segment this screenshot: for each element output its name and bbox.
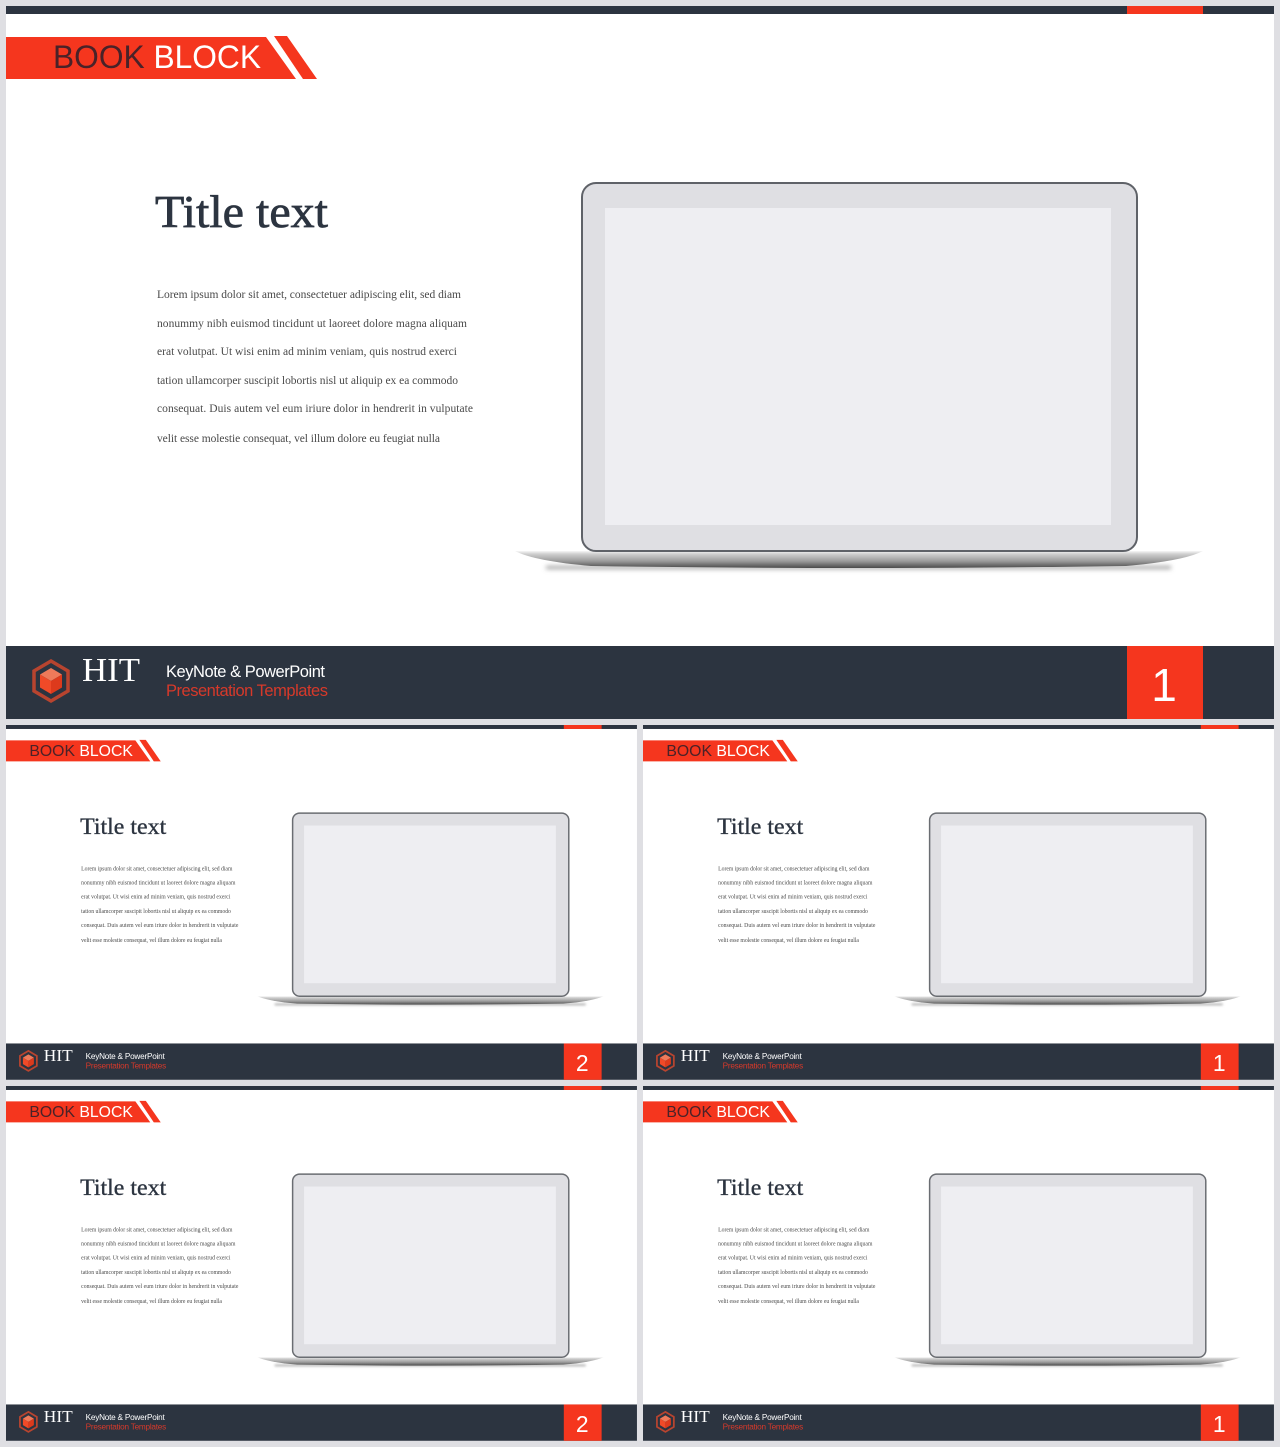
body text: tation ullamcorper suscipit lobortis nisl ut aliquip ex ea commodo bbox=[718, 1270, 868, 1276]
body text: tation ullamcorper suscipit lobortis nisl ut aliquip ex ea commodo bbox=[81, 1270, 231, 1276]
body text: Lorem ipsum dolor sit amet, consectetuer adipiscing elit, sed diam bbox=[81, 1227, 233, 1233]
footer: HIT bbox=[681, 1046, 710, 1065]
top bar bbox=[6, 6, 1274, 14]
body text: erat volutpat. Ut wisi enim ad minim veniam, quis nostrud exerci bbox=[81, 895, 231, 901]
body text: Lorem ipsum dolor sit amet, consectetuer adipiscing elit, sed diam bbox=[718, 1227, 870, 1233]
footer: Presentation Templates bbox=[86, 1061, 166, 1070]
footer: 2 bbox=[576, 1050, 589, 1076]
body text: nonummy nibh euismod tincidunt ut laoreet dolore magna aliquam bbox=[81, 1242, 236, 1248]
ribbon: BOOK BLOCK: BOOK BLOCK bbox=[666, 1104, 770, 1121]
body text: consequat. Duis autem vel eum iriure dolor in hendrerit in vulputate bbox=[157, 403, 473, 415]
body text: consequat. Duis autem vel eum iriure dolor in hendrerit in vulputate bbox=[81, 923, 239, 929]
title: Title text bbox=[155, 186, 328, 237]
footer: Presentation Templates bbox=[723, 1422, 803, 1431]
body text: erat volutpat. Ut wisi enim ad minim veniam, quis nostrud exerci bbox=[718, 895, 868, 901]
body text: consequat. Duis autem vel eum iriure dolor in hendrerit in vulputate bbox=[718, 1284, 876, 1290]
top bar bbox=[6, 1086, 637, 1090]
ribbon: BOOK BLOCK: BOOK BLOCK bbox=[53, 39, 261, 75]
laptop bbox=[515, 183, 1203, 569]
slide 2: small, top left bbox=[6, 725, 637, 1080]
top bar bbox=[643, 725, 1274, 729]
body text: erat volutpat. Ut wisi enim ad minim veniam, quis nostrud exerci bbox=[81, 1256, 231, 1262]
body text: consequat. Duis autem vel eum iriure dolor in hendrerit in vulputate bbox=[718, 923, 876, 929]
body text bbox=[81, 866, 239, 944]
ribbon: BOOK BLOCK bbox=[6, 36, 317, 79]
footer: 1 bbox=[1213, 1411, 1226, 1437]
body text: erat volutpat. Ut wisi enim ad minim veniam, quis nostrud exerci bbox=[718, 1256, 868, 1262]
body text: tation ullamcorper suscipit lobortis nisl ut aliquip ex ea commodo bbox=[157, 375, 458, 387]
ribbon: BOOK BLOCK: BOOK BLOCK bbox=[29, 743, 133, 760]
body text: velit esse molestie consequat, vel illum dolore eu feugiat nulla bbox=[81, 1298, 222, 1305]
body text: velit esse molestie consequat, vel illum dolore eu feugiat nulla bbox=[157, 433, 440, 445]
laptop bbox=[894, 813, 1241, 1005]
body text: tation ullamcorper suscipit lobortis nisl ut aliquip ex ea commodo bbox=[718, 909, 868, 915]
footer: Presentation Templates bbox=[166, 682, 328, 700]
footer bbox=[643, 1404, 1274, 1441]
body text: Lorem ipsum dolor sit amet, consectetuer adipiscing elit, sed diam bbox=[718, 866, 870, 872]
ribbon: BOOK BLOCK: BOOK BLOCK bbox=[29, 1104, 133, 1121]
body text: nonummy nibh euismod tincidunt ut laoreet dolore magna aliquam bbox=[81, 881, 236, 887]
body text bbox=[718, 866, 876, 944]
body text bbox=[157, 289, 473, 445]
footer: KeyNote & PowerPoint bbox=[723, 1413, 802, 1422]
ribbon: BOOK BLOCK bbox=[6, 1101, 161, 1122]
footer bbox=[6, 1043, 637, 1080]
body text: consequat. Duis autem vel eum iriure dolor in hendrerit in vulputate bbox=[81, 1284, 239, 1290]
footer bbox=[6, 1404, 637, 1441]
footer: HIT bbox=[681, 1407, 710, 1426]
slide 4: small, bottom left bbox=[6, 1086, 637, 1441]
top bar bbox=[643, 1086, 1274, 1090]
body text: tation ullamcorper suscipit lobortis nisl ut aliquip ex ea commodo bbox=[81, 909, 231, 915]
title: Title text bbox=[717, 814, 804, 839]
body text: velit esse molestie consequat, vel illum dolore eu feugiat nulla bbox=[81, 937, 222, 944]
footer bbox=[643, 1043, 1274, 1080]
body text bbox=[81, 1227, 239, 1305]
footer bbox=[6, 646, 1274, 719]
footer: KeyNote & PowerPoint bbox=[86, 1413, 165, 1422]
footer: KeyNote & PowerPoint bbox=[86, 1052, 165, 1061]
footer: KeyNote & PowerPoint bbox=[166, 663, 325, 681]
slide 5: small, bottom right bbox=[643, 1086, 1274, 1441]
laptop bbox=[894, 1174, 1241, 1366]
body text: Lorem ipsum dolor sit amet, consectetuer adipiscing elit, sed diam bbox=[157, 289, 461, 301]
body text: velit esse molestie consequat, vel illum dolore eu feugiat nulla bbox=[718, 937, 859, 944]
ribbon: BOOK BLOCK bbox=[643, 1101, 798, 1122]
footer: HIT bbox=[82, 652, 140, 689]
title: Title text bbox=[717, 1175, 804, 1200]
footer: Presentation Templates bbox=[723, 1061, 803, 1070]
footer: KeyNote & PowerPoint bbox=[723, 1052, 802, 1061]
title: Title text bbox=[80, 1175, 167, 1200]
body text: nonummy nibh euismod tincidunt ut laoreet dolore magna aliquam bbox=[718, 881, 873, 887]
footer: 2 bbox=[576, 1411, 589, 1437]
body text: nonummy nibh euismod tincidunt ut laoreet dolore magna aliquam bbox=[157, 318, 467, 330]
slide 3: small, top right bbox=[643, 725, 1274, 1080]
footer: HIT bbox=[44, 1046, 73, 1065]
body text: erat volutpat. Ut wisi enim ad minim veniam, quis nostrud exerci bbox=[157, 346, 457, 358]
top bar bbox=[6, 725, 637, 729]
ribbon: BOOK BLOCK: BOOK BLOCK bbox=[666, 743, 770, 760]
body text: velit esse molestie consequat, vel illum dolore eu feugiat nulla bbox=[718, 1298, 859, 1305]
slide 1: large bbox=[6, 6, 1274, 719]
footer: 1 bbox=[1151, 659, 1177, 711]
laptop bbox=[257, 1174, 604, 1366]
laptop bbox=[257, 813, 604, 1005]
footer: HIT bbox=[44, 1407, 73, 1426]
body text: nonummy nibh euismod tincidunt ut laoreet dolore magna aliquam bbox=[718, 1242, 873, 1248]
body text: Lorem ipsum dolor sit amet, consectetuer adipiscing elit, sed diam bbox=[81, 866, 233, 872]
body text bbox=[718, 1227, 876, 1305]
title: Title text bbox=[80, 814, 167, 839]
footer: 1 bbox=[1213, 1050, 1226, 1076]
footer: Presentation Templates bbox=[86, 1422, 166, 1431]
ribbon: BOOK BLOCK bbox=[643, 740, 798, 761]
ribbon: BOOK BLOCK bbox=[6, 740, 161, 761]
